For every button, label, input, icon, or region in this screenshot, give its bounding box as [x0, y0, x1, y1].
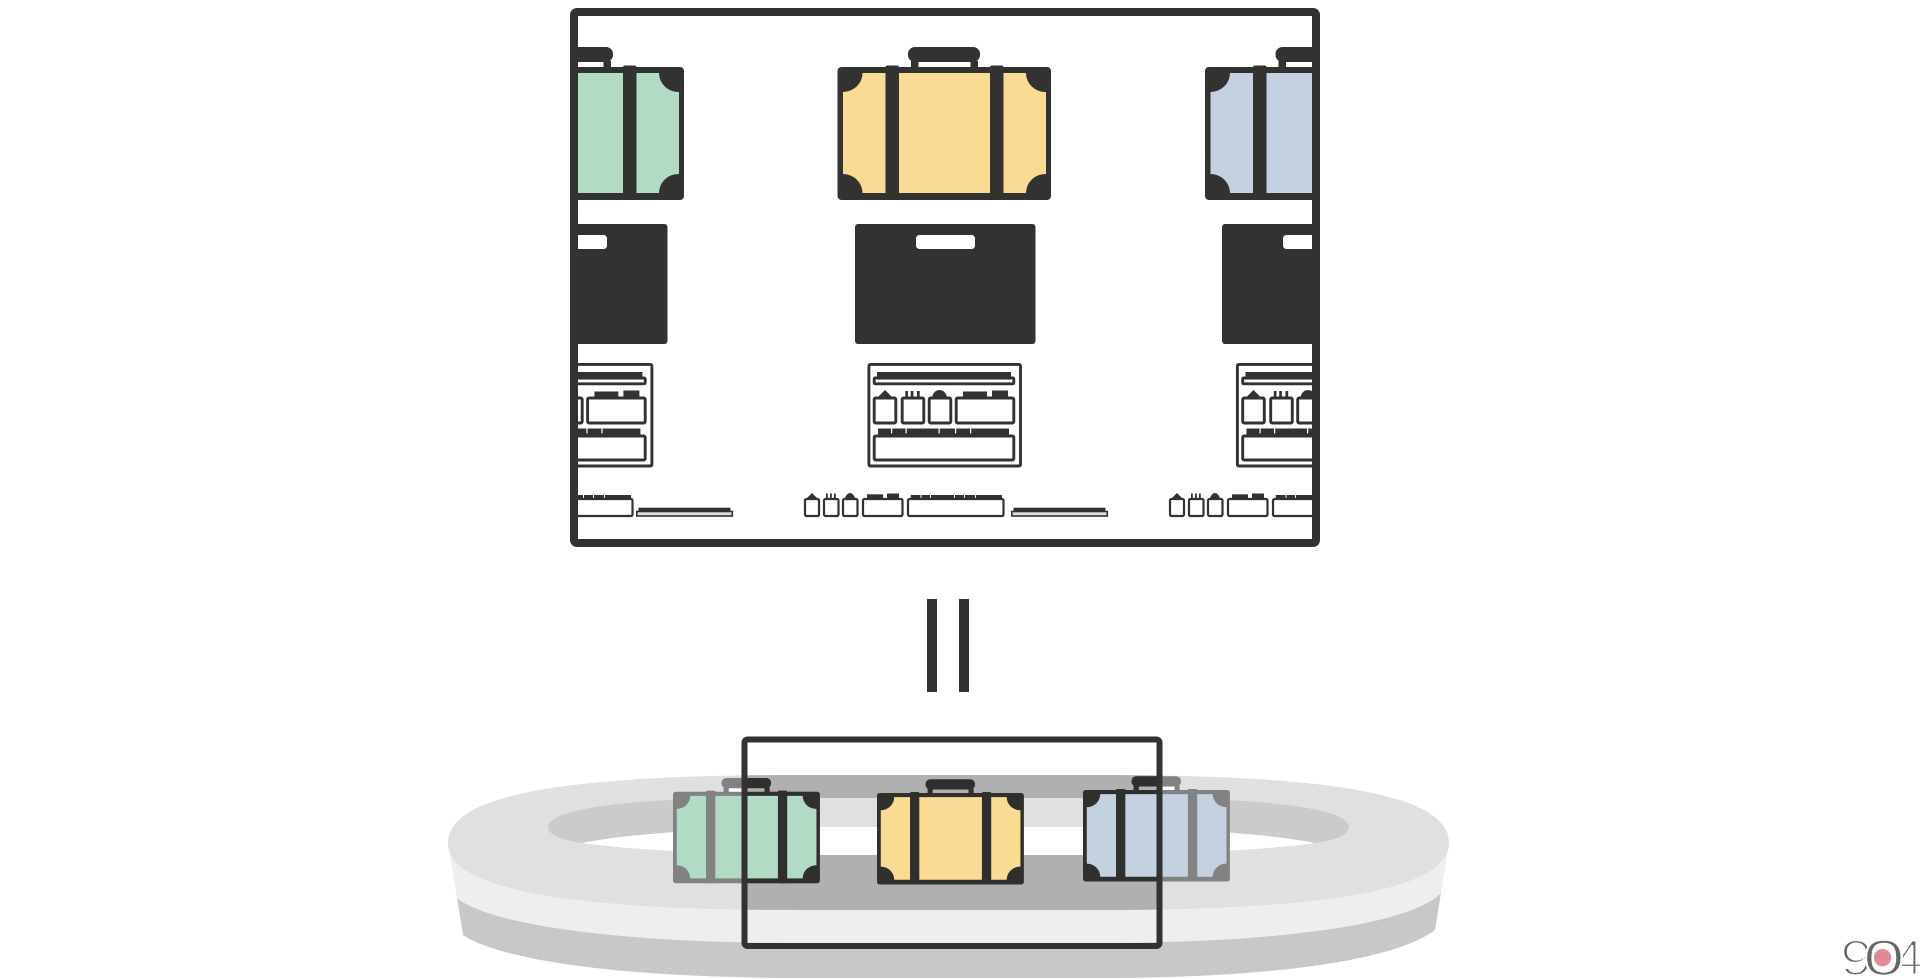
items: left: [578, 495, 634, 518]
suitcase: yellow: [838, 47, 1051, 200]
icon: equals sign: [927, 599, 969, 692]
row of packed trays: [578, 363, 1312, 468]
carousel belt surface: [448, 775, 1449, 910]
frame of the close-up: [574, 12, 1316, 543]
bag: right: [1222, 224, 1312, 344]
tray: right: [1236, 363, 1312, 468]
tray: left: [578, 363, 654, 468]
suitcase on belt: green: [673, 778, 820, 883]
panel: close-up of the baggage scene: [570, 8, 1320, 547]
row of dark closed bags: [578, 224, 1312, 344]
suitcase on belt: yellow: [877, 779, 1024, 885]
items: centre: [805, 493, 1004, 516]
bag: centre: [855, 224, 1036, 344]
viewing frame: [744, 740, 1160, 946]
bag: left: [578, 224, 668, 344]
tray: centre: [869, 364, 1020, 466]
row of unpacked items: [578, 493, 1312, 518]
panel: baggage carousel with viewing frame: [448, 740, 1449, 978]
carousel side band: [448, 843, 1449, 943]
suitcase: green: [578, 47, 684, 200]
carousel centre opening: [582, 827, 1315, 855]
carousel inner wall: [548, 798, 1349, 855]
row of suitcases: [578, 47, 1312, 200]
flat item: left: [637, 508, 732, 516]
logo: 904: [1840, 930, 1920, 979]
carousel base: [457, 893, 1441, 978]
suitcase: blue: [1205, 47, 1312, 200]
suitcase on belt: blue: [1083, 776, 1230, 882]
items: right: [1168, 493, 1312, 518]
flat item: centre: [1012, 508, 1107, 516]
highlighted belt inside the frame: [748, 775, 1156, 910]
